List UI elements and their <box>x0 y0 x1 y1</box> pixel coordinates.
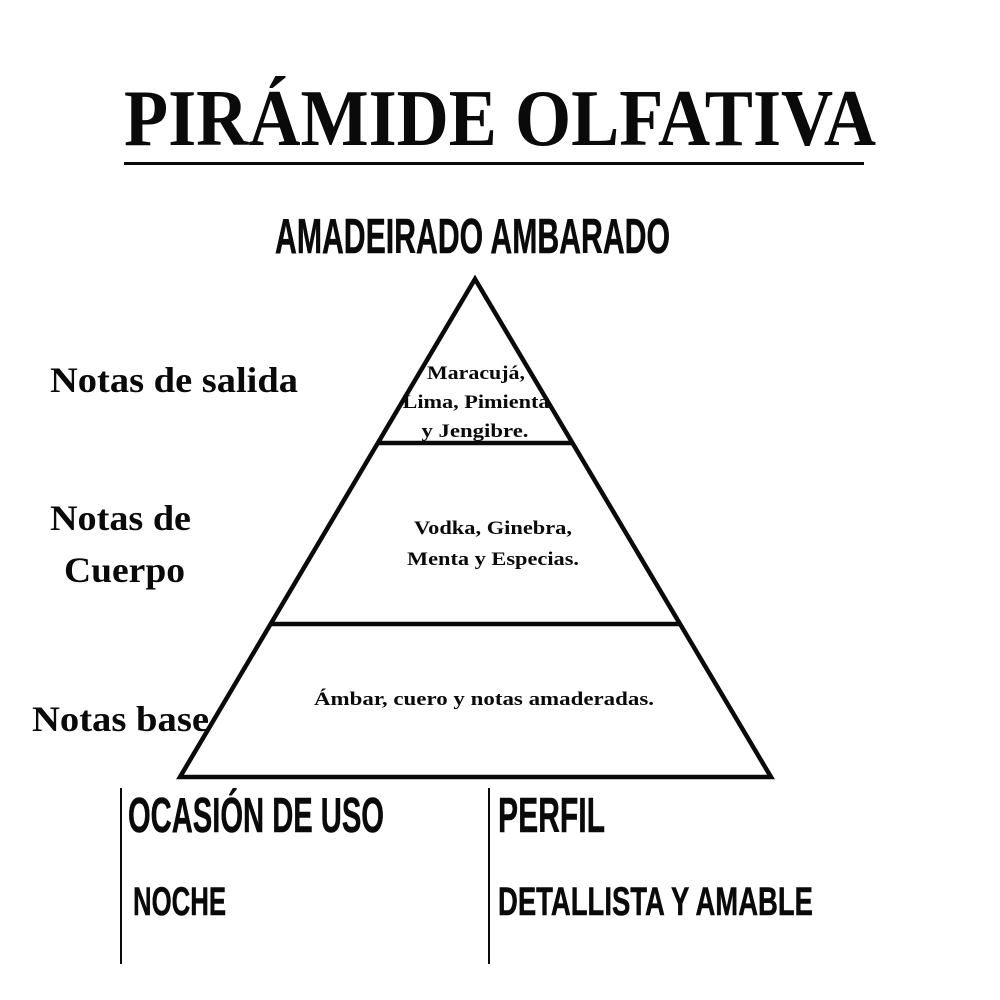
top tier notes: Lima, Pimienta <box>402 392 550 413</box>
middle tier notes <box>407 518 579 570</box>
heading: perfil: PERFIL <box>498 789 605 843</box>
pyramid <box>180 279 771 777</box>
left rule <box>120 788 122 964</box>
pyramid outline <box>180 279 771 777</box>
top tier notes <box>402 363 550 442</box>
heading: ocasión de uso: OCASIÓN DE USO <box>128 788 384 843</box>
label: notas base: Notas base <box>32 699 209 739</box>
value: detallista y amable: DETALLISTA Y AMABLE <box>498 880 813 924</box>
base tier notes: Ámbar, cuero y notas amaderadas. <box>314 688 654 710</box>
top tier notes: Maracujá, <box>427 363 525 384</box>
panel: perfil <box>488 788 813 964</box>
subtitle: AMADEIRADO AMBARADO <box>275 210 670 264</box>
title: PIRÁMIDE OLFATIVA <box>124 73 876 163</box>
label: notas de salida: Notas de salida <box>50 360 298 400</box>
title underline <box>124 162 864 165</box>
middle tier notes: Vodka, Ginebra, <box>414 518 572 539</box>
panel: ocasión de uso <box>120 788 384 964</box>
label: notas de cuerpo <box>50 498 191 590</box>
left rule <box>488 788 490 964</box>
divider: middle and base tiers <box>272 622 680 626</box>
top tier notes: y Jengibre. <box>422 421 528 442</box>
label: notas de cuerpo: Notas de <box>50 498 191 538</box>
label: notas de cuerpo: Cuerpo <box>64 550 185 590</box>
middle tier notes: Menta y Especias. <box>407 549 579 570</box>
divider: top and middle tiers <box>378 441 573 445</box>
value: noche: NOCHE <box>133 880 226 924</box>
